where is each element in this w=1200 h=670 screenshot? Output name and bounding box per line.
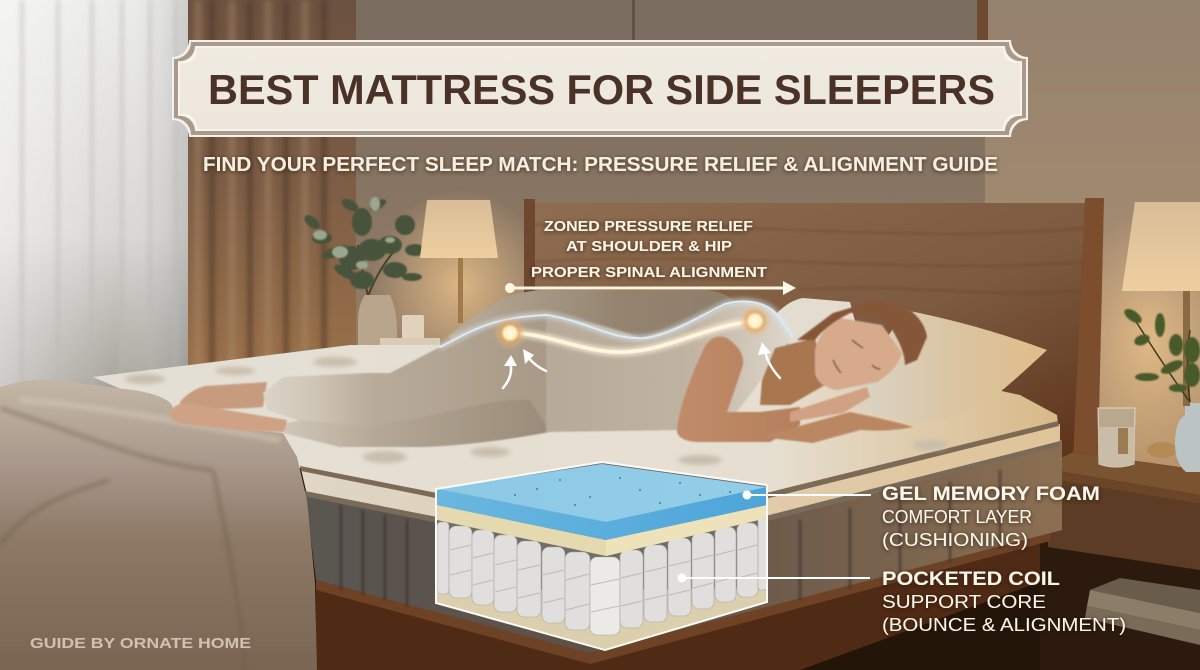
- shirt: [546, 302, 792, 432]
- hair: [797, 300, 927, 365]
- alignment glow overlay: [440, 301, 792, 388]
- arrow: hip side: [523, 349, 546, 371]
- headboard: [524, 198, 1104, 463]
- lower foot: [170, 403, 287, 432]
- label: gel memory foam: GEL MEMORY FOAM: [882, 484, 1100, 505]
- draped blanket: [0, 380, 317, 670]
- lower forearm: [760, 412, 913, 443]
- white outline: [436, 462, 767, 650]
- label: gel memory foam: [882, 484, 1100, 550]
- callout: zoned pressure relief: [544, 219, 753, 255]
- label: gel memory foam: (CUSHIONING): [882, 530, 1028, 550]
- right side table with glass and vase: [1040, 403, 1200, 670]
- pocketed coils: [437, 518, 767, 635]
- hands: [790, 387, 870, 422]
- upper trouser leg: [263, 315, 550, 432]
- shoulder pressure point: [738, 304, 772, 338]
- left table lamp: [420, 200, 498, 323]
- top surface: [93, 345, 1058, 530]
- leader: pocketed coil: [678, 574, 870, 582]
- label: pocketed coil: POCKETED COIL: [882, 569, 1060, 590]
- arrow: hip lower: [503, 355, 517, 388]
- gel foam side: [437, 487, 767, 540]
- credit: GUIDE BY ORNATE HOME: [30, 635, 251, 652]
- title plaque: [172, 40, 1028, 137]
- upper arm: [677, 336, 800, 442]
- base foam layer: [437, 588, 767, 649]
- bed frame: [316, 533, 1050, 670]
- label: gel memory foam: COMFORT LAYER: [882, 507, 1032, 527]
- top foot: [180, 382, 267, 409]
- gel specks: [514, 477, 731, 506]
- body contour: [440, 301, 792, 347]
- gel foam top: [437, 464, 767, 522]
- right table lamp and plant: [1122, 202, 1200, 406]
- closed eyes and mouth: [833, 340, 880, 373]
- subtitle: FIND YOUR PERFECT SLEEP MATCH: PRESSURE RELIEF & ALIGNMENT GUIDE: [203, 154, 998, 176]
- neck and chest: [760, 338, 825, 405]
- face: [815, 318, 902, 390]
- sheer window curtain: [0, 0, 192, 390]
- main pillow: [850, 310, 1047, 423]
- left plant and vase: [302, 196, 440, 349]
- callout: zoned pressure relief: AT SHOULDER & HIP: [566, 239, 732, 255]
- callout: zoned pressure relief: ZONED PRESSURE RELIEF: [544, 219, 753, 235]
- back pillows: [448, 290, 860, 350]
- label: pocketed coil: [882, 569, 1126, 635]
- label: pocketed coil: SUPPORT CORE: [882, 592, 1046, 612]
- leader: gel memory foam: [742, 490, 871, 500]
- callout: proper spinal alignment: PROPER SPINAL ALIGNMENT: [531, 265, 767, 281]
- hip pressure point: [493, 316, 527, 350]
- spine curve: [510, 321, 755, 352]
- mattress: [93, 345, 1062, 653]
- cream transition layer: [437, 505, 767, 556]
- mattress cross-section inset: [436, 462, 767, 650]
- brown curtain: [188, 0, 356, 366]
- sleeping woman: [170, 300, 927, 447]
- coil fabric creases: [450, 545, 757, 612]
- label: pocketed coil: (BOUNCE & ALIGNMENT): [882, 615, 1126, 635]
- title: BEST MATTRESS FOR SIDE SLEEPERS: [208, 66, 995, 113]
- lower trouser leg: [283, 395, 550, 447]
- side panel: [305, 440, 1062, 653]
- backing: [436, 463, 767, 650]
- spinal alignment arrow: [505, 281, 796, 295]
- arrow: shoulder: [758, 342, 780, 378]
- side band: [301, 424, 1060, 556]
